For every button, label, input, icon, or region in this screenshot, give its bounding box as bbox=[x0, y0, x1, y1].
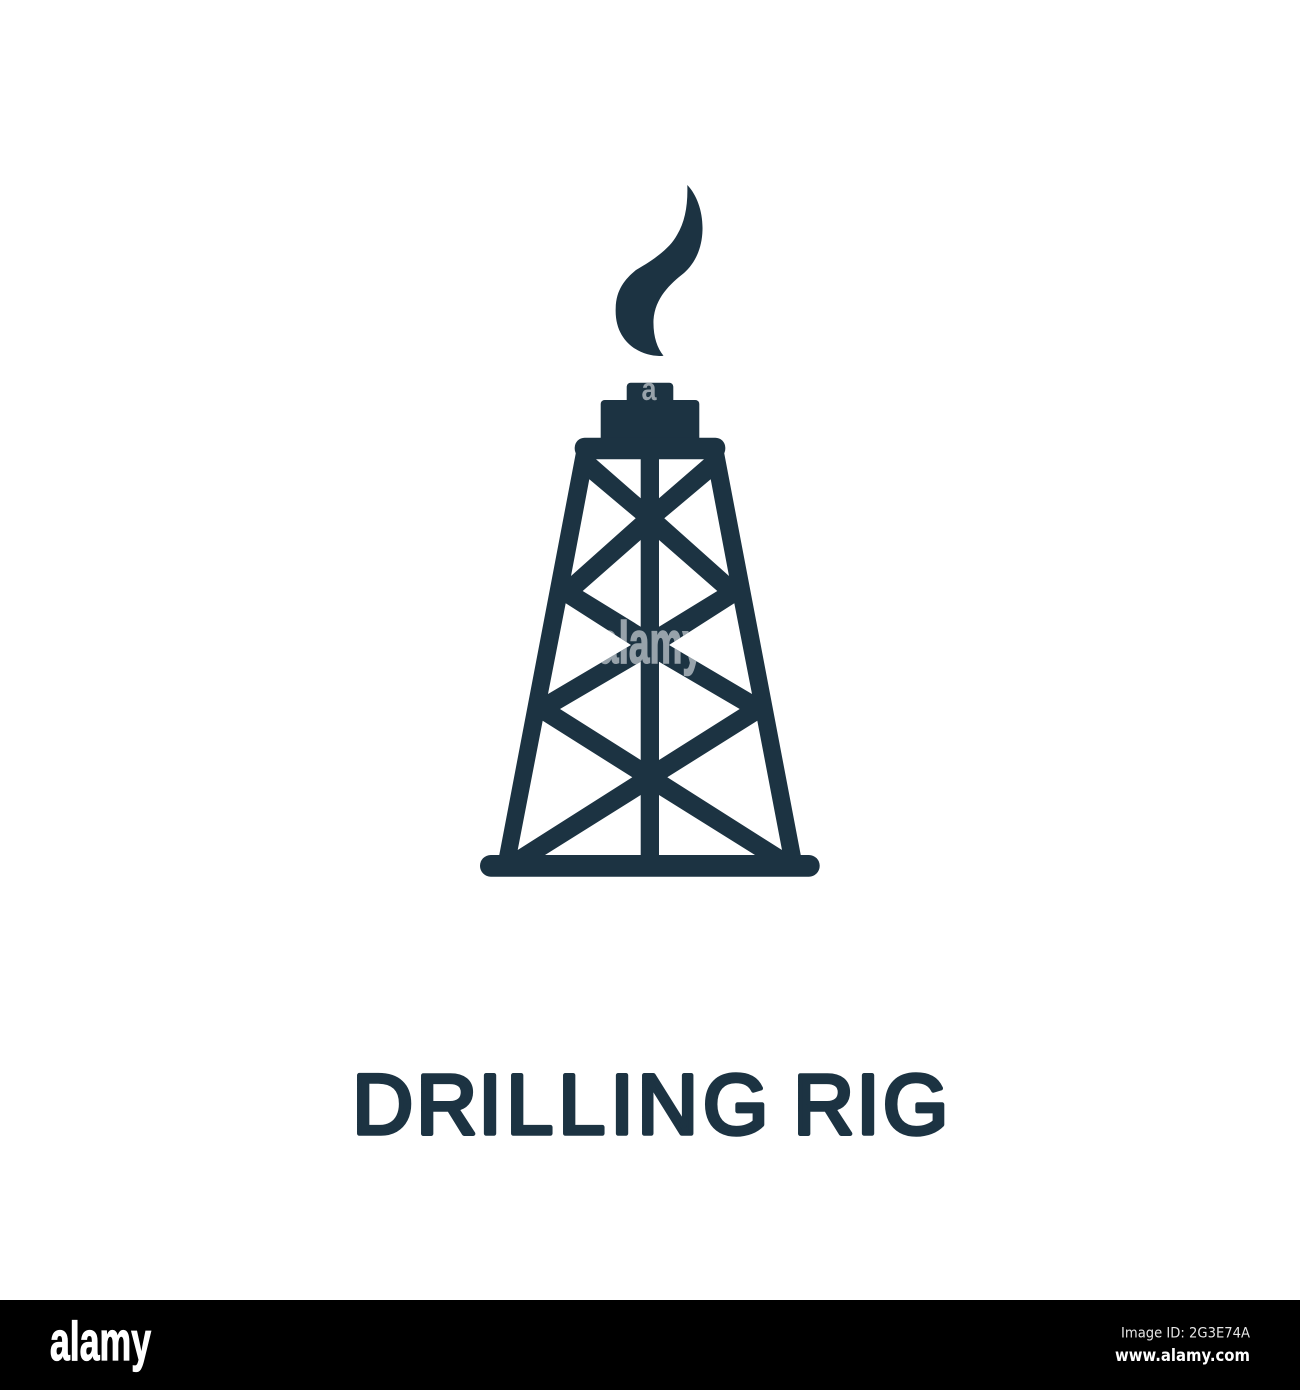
watermark on cap: a bbox=[642, 371, 657, 407]
image id: Image ID: 2G3E74A bbox=[1121, 1326, 1250, 1342]
rig head block bbox=[601, 400, 699, 445]
website: www.alamy.com bbox=[1115, 1346, 1250, 1365]
title: DRILLING RIG bbox=[352, 1058, 948, 1152]
icon: drilling rig bbox=[480, 185, 820, 877]
rig base bar bbox=[480, 855, 820, 877]
rig tower lattice bbox=[498, 450, 802, 860]
rig top bar bbox=[575, 438, 725, 459]
footer logo: alamy bbox=[50, 1310, 151, 1372]
watermark on tower: alamy bbox=[598, 610, 703, 676]
footer bar bbox=[0, 1300, 1300, 1390]
icon: flame bbox=[616, 185, 703, 356]
rig top cap bbox=[627, 383, 673, 407]
